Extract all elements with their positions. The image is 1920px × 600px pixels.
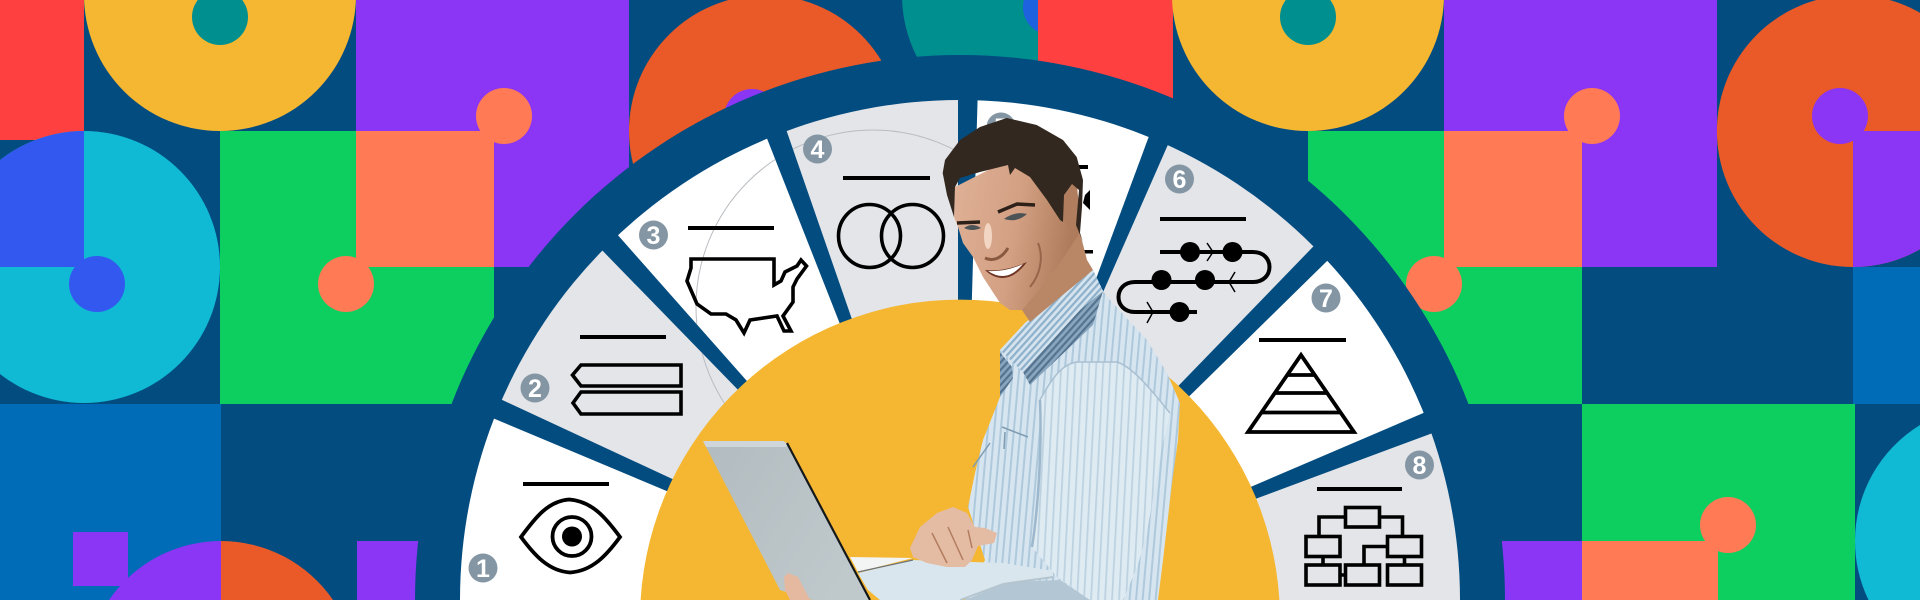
segment 8 — [1256, 434, 1460, 600]
hair — [943, 118, 1083, 242]
navy outer ring of the wheel — [415, 55, 1505, 600]
number badges — [468, 112, 1434, 583]
shirt — [965, 270, 1180, 600]
icon 7: pyramid — [1248, 338, 1354, 432]
faint circle line across segments 2 to 4 — [696, 130, 954, 404]
icon 1: eye — [521, 482, 620, 572]
badge 5: 5 — [994, 114, 1008, 142]
segment 3 — [618, 138, 840, 381]
face — [954, 160, 1080, 310]
icon 6: process flow — [1118, 217, 1270, 323]
badge 2 — [520, 374, 550, 403]
badge 3: 3 — [647, 222, 660, 250]
badge 4 — [803, 134, 832, 164]
badge 5 — [986, 112, 1016, 142]
segment 6 — [1103, 145, 1314, 386]
wheel segments — [460, 100, 1460, 600]
badge 6: 6 — [1173, 166, 1186, 194]
badge 3 — [639, 220, 668, 250]
badge 8 — [1405, 450, 1434, 480]
segment 7 — [1189, 260, 1424, 487]
laptop screen — [703, 441, 870, 600]
hand on keyboard — [910, 507, 997, 567]
icon 8: organisation chart — [1306, 487, 1422, 585]
badge 6 — [1165, 164, 1194, 194]
icon 3: USA map — [687, 226, 806, 333]
yellow centre disc — [641, 300, 1279, 600]
neck — [1000, 225, 1093, 322]
badge 1 — [468, 554, 498, 583]
badge 4: 4 — [811, 136, 825, 164]
icon 5: partly hidden pictogram — [1000, 165, 1093, 254]
segment 2 — [502, 250, 738, 479]
icon 2: stacked tag bars — [572, 335, 681, 414]
hand on laptop edge — [784, 573, 810, 600]
badge 7: 7 — [1319, 285, 1333, 313]
segment 1 — [460, 418, 667, 600]
badge 8: 8 — [1413, 452, 1427, 480]
segment 5 — [972, 100, 1149, 302]
badge 7 — [1312, 284, 1340, 313]
laptop base — [850, 557, 1053, 600]
badge 2: 2 — [528, 375, 542, 403]
icon 4: venn diagram — [838, 176, 944, 268]
man with laptop — [703, 118, 1180, 600]
badge 1: 1 — [476, 555, 490, 583]
segment 4 — [786, 100, 958, 319]
